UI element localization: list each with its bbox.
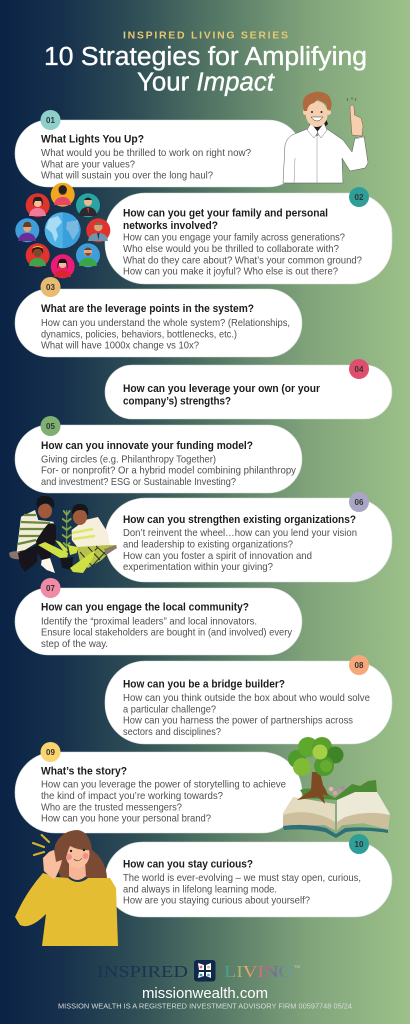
body 05: For- or nonprofit? Or a hybrid model combining philanthropy <box>41 466 297 477</box>
body 07: Identify the “proximal leaders” and local innovators. <box>41 616 257 627</box>
body 07 <box>41 616 293 650</box>
heading 10: How can you stay curious? <box>123 859 253 871</box>
body 01: What are your values? <box>41 160 135 170</box>
body 07: step of the way. <box>41 639 108 650</box>
badge 06: 06 <box>355 498 364 507</box>
body 09 <box>41 780 286 825</box>
body 08 <box>123 693 370 738</box>
body 09: the kind of impact you’re working towards? <box>41 791 223 802</box>
panel: strategy 07 <box>15 578 302 655</box>
badge 05 <box>40 416 60 436</box>
body 09: How can you leverage the power of storytelling to achieve <box>41 780 286 791</box>
series label: INSPIRED LIVING SERIES <box>123 30 288 42</box>
illustration: man pointing up <box>283 92 368 183</box>
badge 07: 07 <box>46 584 55 593</box>
body 03: What will have 1000x change vs 10x? <box>41 340 199 351</box>
badge 10 <box>349 834 369 854</box>
heading 02: networks involved? <box>123 220 218 232</box>
panel: strategy 06 <box>105 492 392 582</box>
badge 08 <box>349 655 369 675</box>
title: 10 Strategies for Amplifying <box>44 43 367 71</box>
body 06: experimentation within your giving? <box>123 562 273 573</box>
illustration: tree growing from open book <box>283 737 390 838</box>
badge 03 <box>40 277 60 297</box>
heading 05: How can you innovate your funding model? <box>41 440 253 452</box>
body 07: Ensure local stakeholders are bought in (and involved) every <box>41 628 293 639</box>
badge 04 <box>349 359 369 379</box>
footer logo: Inspired Living: TM <box>294 964 300 969</box>
body 02 <box>123 233 362 278</box>
body 10: and always in lifelong learning mode. <box>123 884 277 895</box>
body 03: How can you understand the whole system? (Relationships, <box>41 318 290 329</box>
heading 03: What are the leverage points in the system? <box>41 303 254 315</box>
badge 05: 05 <box>46 422 55 431</box>
icon: logo flower <box>194 960 216 982</box>
badge 03: 03 <box>46 283 55 292</box>
badge 02 <box>349 187 369 207</box>
heading 06: How can you strengthen existing organizations? <box>123 514 356 526</box>
body 03 <box>41 318 290 351</box>
panel: strategy 05 <box>15 416 302 493</box>
badge 02: 02 <box>355 193 364 202</box>
title: Your Impact <box>137 69 275 97</box>
title <box>44 43 367 97</box>
badge 08: 08 <box>355 661 364 670</box>
badge 01 <box>40 110 60 130</box>
footer logo: Inspired Living <box>97 960 300 982</box>
badge 06 <box>349 492 369 512</box>
illustration: woman cupping ear <box>15 830 118 946</box>
badge 07 <box>40 578 60 598</box>
footer logo: Inspired Living: LIVING <box>224 962 293 981</box>
badge 09: 09 <box>46 748 55 757</box>
heading 04 <box>123 383 321 408</box>
panel: strategy 01 <box>15 110 302 187</box>
badge 10: 10 <box>355 840 364 849</box>
body 10: The world is ever-evolving – we must stay open, curious, <box>123 873 361 884</box>
heading 07: How can you engage the local community? <box>41 602 249 614</box>
badge 09 <box>40 742 60 762</box>
body 08: How can you think outside the box about who would solve <box>123 693 370 704</box>
badge 04: 04 <box>355 365 364 374</box>
panel: strategy 08 <box>105 655 392 744</box>
footer logo: Inspired Living: INSPIRED <box>97 962 188 981</box>
illustration: globe with people <box>15 183 110 278</box>
body 02: What do they care about? What’s your common ground? <box>123 255 362 266</box>
panel: strategy 02 <box>105 187 392 284</box>
plant <box>63 510 71 553</box>
body 10: How are you staying curious about yourself? <box>123 896 310 907</box>
illustration: two people planting <box>9 496 117 573</box>
heading 04: How can you leverage your own (or your <box>123 383 321 395</box>
disclosure: MISSION WEALTH IS A REGISTERED INVESTMENT ADVISORY FIRM 00597748 05/24 <box>58 1004 352 1011</box>
body 09: Who are the trusted messengers? <box>41 802 182 813</box>
website: missionwealth.com <box>142 985 268 1002</box>
body 02: How can you make it joyful? Who else is out there? <box>123 267 338 278</box>
body 08: How can you harness the power of partnerships across <box>123 716 353 727</box>
heading 04: company’s) strengths? <box>123 396 231 408</box>
badge 01: 01 <box>46 116 55 125</box>
body 08: a particular challenge? <box>123 704 216 715</box>
body 05: Giving circles (e.g. Philanthropy Together) <box>41 454 216 465</box>
body 06: Don’t reinvent the wheel…how can you lend your vision <box>123 528 357 539</box>
body 09: How can you hone your personal brand? <box>41 814 211 825</box>
heading 01: What Lights You Up? <box>41 134 144 146</box>
body 06: and leadership to existing organizations? <box>123 540 293 550</box>
body 06: How can you foster a spirit of innovation and <box>123 551 312 562</box>
body 03: dynamics, policies, behaviors, bottlenecks, etc.) <box>41 330 237 340</box>
heading 02 <box>123 208 328 232</box>
body 05: and investment? ESG or Sustainable Investing? <box>41 477 236 488</box>
panel: strategy 03 <box>15 277 302 357</box>
body 01 <box>41 148 251 182</box>
panel: strategy 04 <box>105 359 392 419</box>
body 05 <box>41 454 297 488</box>
body 02: Who else would you be thrilled to collaborate with? <box>123 244 339 255</box>
panel: strategy 10 <box>105 834 392 917</box>
body 08: sectors and disciplines? <box>123 727 221 738</box>
body 01: What would you be thrilled to work on right now? <box>41 148 251 159</box>
body 10 <box>123 873 361 907</box>
body 06 <box>123 528 357 573</box>
heading 09: What’s the story? <box>41 766 127 778</box>
panel: strategy 09 <box>15 742 302 833</box>
heading 08: How can you be a bridge builder? <box>123 679 285 691</box>
body 02: How can you engage your family across generations? <box>123 233 345 244</box>
heading 02: How can you get your family and personal <box>123 208 328 220</box>
body 01: What will sustain you over the long haul? <box>41 170 213 182</box>
